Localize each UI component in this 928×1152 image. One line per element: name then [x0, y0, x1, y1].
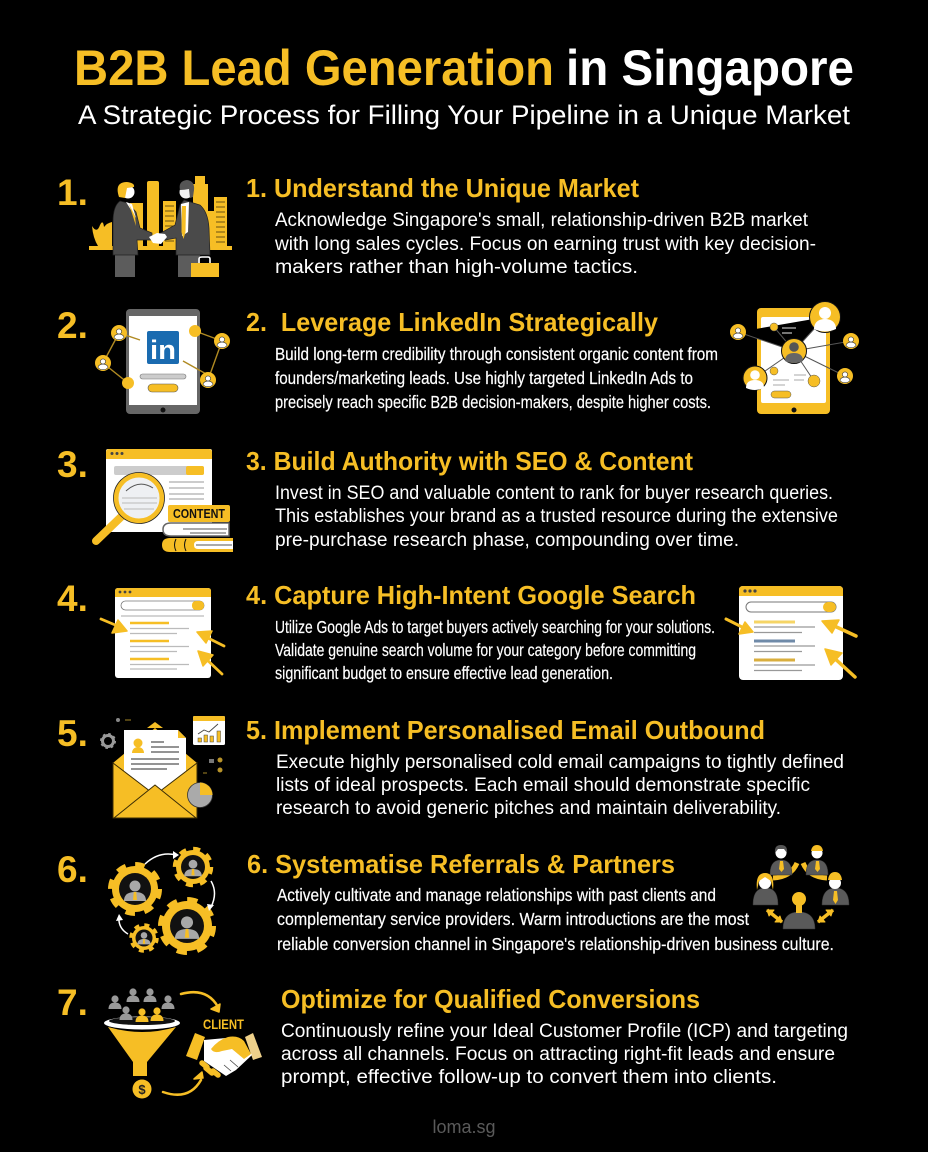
icon: funnel and handshake	[104, 988, 262, 1098]
panel: step 1	[57, 172, 816, 278]
text 3: This establishes your brand as a trusted resource during the extensive	[275, 506, 838, 527]
text 6: complementary service providers. Warm introductions are the most	[277, 909, 749, 929]
icon: search results with arrows	[726, 586, 856, 680]
title: in Singapore	[566, 40, 854, 96]
text 5	[276, 752, 844, 819]
heading 5: 5. Implement Personalised Email Outbound	[246, 715, 765, 745]
title: B2B Lead Generation	[74, 40, 554, 96]
number 5: 5.	[57, 713, 88, 754]
number 6: 6.	[57, 849, 88, 890]
icon: referral gears	[110, 849, 214, 952]
icon: SEO magnifier and books	[96, 449, 233, 552]
text 7: across all channels. Focus on attracting right-fit leads and ensure	[281, 1044, 835, 1065]
heading 4: 4. Capture High-Intent Google Search	[246, 580, 696, 610]
panel: step 3	[57, 444, 838, 552]
number 3: 3.	[57, 444, 88, 485]
text 7	[281, 1021, 848, 1088]
panel: step 6	[57, 845, 849, 954]
icon: funnel and handshake: CLIENT	[203, 1017, 245, 1032]
number 1: 1.	[57, 172, 88, 213]
subtitle: A Strategic Process for Filling Your Pipeline in a Unique Market	[78, 100, 851, 130]
text 1: with long sales cycles. Focus on earning trust with key decision-	[274, 234, 816, 255]
text 1	[274, 210, 816, 278]
panel: step 7	[57, 982, 848, 1098]
text 4: Validate genuine search volume for your category before committing	[275, 640, 696, 660]
text 2	[275, 344, 718, 412]
icon: handshake skyline	[89, 176, 232, 277]
footer: loma.sg	[432, 1117, 496, 1137]
text 7: Continuously refine your Ideal Customer Profile (ICP) and targeting	[281, 1021, 848, 1042]
text 2: precisely reach specific B2B decision-makers, despite higher costs.	[275, 392, 711, 412]
icon: email envelope	[101, 716, 225, 818]
text 3	[275, 483, 838, 551]
text 6	[277, 885, 834, 954]
text 4: Utilize Google Ads to target buyers actively searching for your solutions.	[275, 617, 715, 637]
text 5: lists of ideal prospects. Each email should demonstrate specific	[276, 775, 810, 796]
heading 7: Optimize for Qualified Conversions	[281, 984, 700, 1014]
heading 6: 6. Systematise Referrals & Partners	[247, 849, 675, 879]
text 2: Build long-term credibility through consistent organic content from	[275, 344, 718, 364]
panel: step 4	[57, 578, 856, 683]
icon: LinkedIn tablet	[95, 309, 230, 414]
title	[74, 40, 854, 96]
heading 1: 1. Understand the Unique Market	[246, 173, 639, 203]
number 2: 2.	[57, 305, 88, 346]
text 6: reliable conversion channel in Singapore's relationship-driven business culture.	[277, 934, 834, 954]
icon: tablet network	[730, 302, 859, 414]
text 4	[275, 617, 715, 683]
text 2: founders/marketing leads. Use highly targeted LinkedIn Ads to	[275, 368, 693, 388]
number 7: 7.	[57, 982, 88, 1023]
heading 2: 2. Leverage LinkedIn Strategically	[246, 307, 659, 337]
text 3: Invest in SEO and valuable content to rank for buyer research queries.	[275, 483, 833, 504]
icon: search results window	[101, 588, 224, 678]
text 3: pre-purchase research phase, compounding over time.	[275, 530, 739, 551]
text 1: Acknowledge Singapore's small, relationship-driven B2B market	[275, 210, 809, 231]
panel: step 5	[57, 713, 844, 819]
text 6: Actively cultivate and manage relationships with past clients and	[277, 885, 716, 905]
text 7: prompt, effective follow-up to convert them into clients.	[281, 1067, 777, 1088]
panel: step 2	[57, 302, 859, 414]
icon: funnel and handshake: $	[138, 1082, 146, 1097]
text 5: research to avoid generic pitches and maintain deliverability.	[276, 798, 781, 819]
icon: LinkedIn tablet: in	[150, 335, 176, 365]
heading 3: 3. Build Authority with SEO & Content	[246, 446, 693, 476]
text 4: significant budget to ensure effective lead generation.	[275, 663, 613, 683]
text 1: makers rather than high-volume tactics.	[275, 257, 638, 278]
number 4: 4.	[57, 578, 88, 619]
icon: SEO magnifier and books: CONTENT	[173, 507, 225, 521]
text 5: Execute highly personalised cold email campaigns to tightly defined	[276, 752, 844, 773]
icon: partner network	[753, 845, 849, 929]
